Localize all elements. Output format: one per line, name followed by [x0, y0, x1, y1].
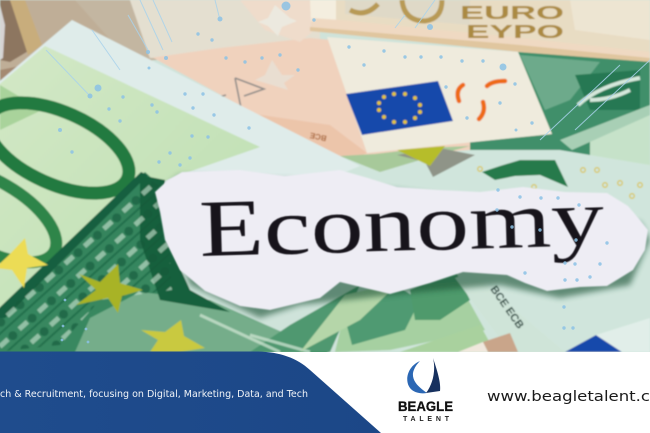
- pale note under the card: [330, 150, 650, 360]
- Economy word: Economy: [198, 175, 605, 274]
- EURO text: EYPO: [466, 22, 564, 42]
- white card with EU flag: [327, 37, 552, 153]
- EURO text: [460, 3, 564, 42]
- lower engraved note: [0, 172, 350, 360]
- engraved texture: [0, 178, 172, 352]
- bottom white band: [0, 352, 650, 433]
- blue and white corner: [565, 335, 622, 352]
- brown background note, top left: [0, 0, 190, 90]
- torn paper shadow: [155, 175, 650, 318]
- star on pale note: [397, 148, 475, 177]
- logo: Beagle Talent: [398, 358, 453, 423]
- yellow rings: [478, 167, 642, 198]
- logo wordmark: BEAGLE: [398, 398, 453, 414]
- EU flag: [346, 81, 453, 135]
- torn paper strip: [155, 170, 648, 310]
- star on peach note: [255, 60, 295, 90]
- logo subtitle: TALENT: [403, 416, 450, 423]
- logo sail icon: [407, 358, 440, 393]
- peach note: [148, 38, 650, 165]
- top 50 euro note: [310, 0, 650, 62]
- triangle mark on peach note: [216, 78, 264, 108]
- dark green patch: [482, 160, 568, 187]
- numeral zero rings: [0, 84, 142, 212]
- pale strip with ECB text: [455, 272, 565, 352]
- large green note with numerals: [0, 20, 360, 340]
- blue dot overlay: [46, 0, 650, 343]
- brown note corner: [483, 333, 518, 352]
- BCE small text: BCE: [308, 130, 327, 143]
- green engraved note, right: [470, 52, 650, 170]
- grey-beige note, top: [75, 0, 160, 62]
- EURO text: EURO: [460, 3, 564, 23]
- green ribbons below paper: [335, 285, 485, 352]
- yellow stars: [0, 238, 48, 288]
- photo: euro banknotes: BCE ECB: [488, 284, 526, 331]
- numeral 50: [350, 0, 442, 21]
- footer tagline: ch & Recruitment, focusing on Digital, Marketing, Data, and Tech: [0, 389, 308, 400]
- orange S mark: [458, 81, 505, 119]
- blue footer shape: [0, 352, 381, 433]
- website url: www.beagletalent.c: [487, 389, 650, 405]
